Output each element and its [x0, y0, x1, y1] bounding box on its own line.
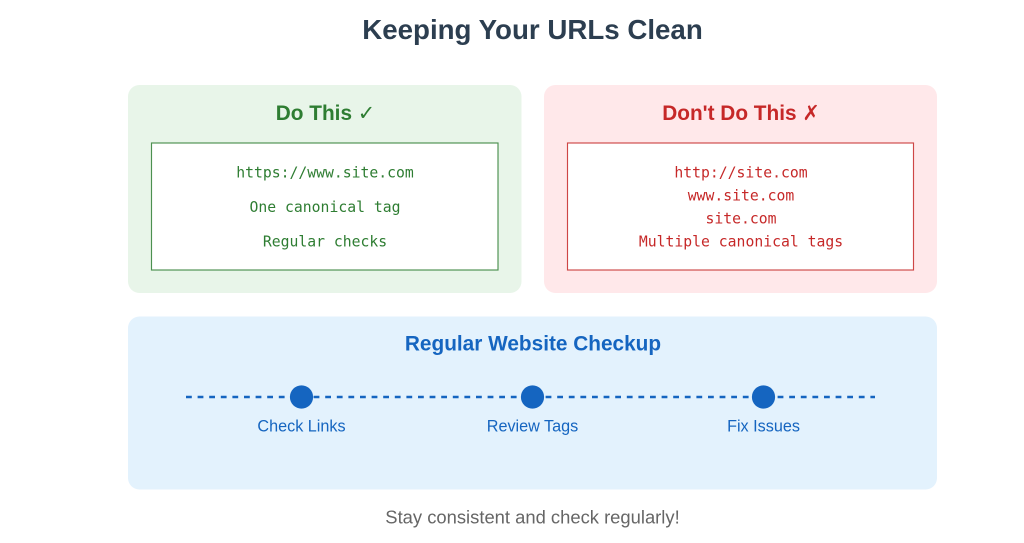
box: don't do list	[568, 143, 914, 270]
title: Keeping Your URLs Clean	[362, 14, 703, 45]
step: review tags: Review Tags	[487, 418, 578, 436]
box: don't do list: www.site.com	[688, 188, 794, 204]
step: check links: Check Links	[257, 418, 346, 436]
timeline	[186, 385, 875, 436]
box: do this list: One canonical tag	[250, 199, 400, 216]
box: do this list	[152, 143, 498, 270]
box: don't do list: site.com	[705, 210, 777, 228]
footer note: Stay consistent and check regularly!	[385, 506, 680, 528]
panel: do this	[128, 85, 522, 293]
heading: don't do this: Don't Do This ✗	[662, 101, 820, 125]
box: don't do list: http://site.com	[674, 164, 808, 182]
panel: regular website checkup	[128, 316, 937, 490]
box: do this list: https://www.site.com	[236, 164, 414, 182]
box: don't do list: Multiple canonical tags	[639, 234, 843, 250]
step: check links	[257, 385, 346, 436]
heading: do this: Do This ✓	[276, 101, 375, 125]
step: fix issues	[727, 385, 800, 436]
step: fix issues: Fix Issues	[727, 418, 800, 436]
panel: don't do this	[544, 85, 937, 293]
heading: checkup: Regular Website Checkup	[405, 332, 661, 356]
box: do this list: Regular checks	[263, 234, 387, 250]
step: review tags	[487, 385, 578, 436]
